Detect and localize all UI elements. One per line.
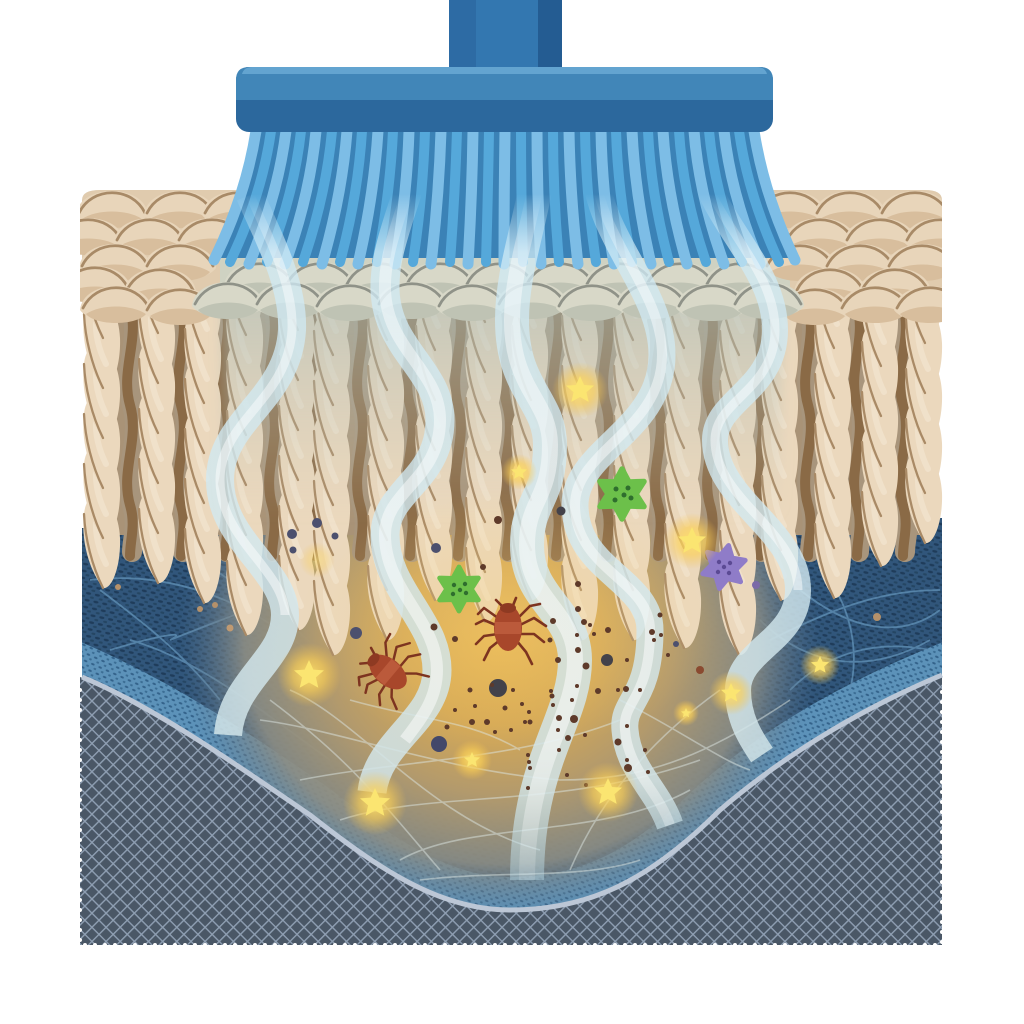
sparkle stars [277, 362, 840, 835]
warm glow over strand tips [300, 490, 720, 750]
dirt particles [115, 506, 881, 790]
pale divider line [82, 675, 942, 910]
microbe: green lower [440, 567, 478, 611]
damp tint on strands under the brush [222, 270, 782, 520]
golden glow behind debris [188, 535, 812, 908]
bug: mite on left [347, 626, 437, 717]
carpet backing layer [82, 518, 942, 908]
stream 2 [372, 190, 440, 792]
backing mesh [80, 675, 942, 945]
water streams [220, 165, 798, 880]
stream 4 [575, 170, 670, 825]
brush bristles [214, 131, 795, 264]
microbe: purple [700, 541, 748, 593]
brush handle [449, 0, 562, 68]
carpet pile: rear strands [88, 300, 933, 556]
bug: mite near centre [476, 598, 546, 664]
pale fibres in the glow [260, 690, 790, 880]
light blue band above the mesh [50, 665, 975, 910]
microbe: green upper [600, 469, 644, 519]
backing fibres [90, 570, 940, 700]
stream 5 [700, 165, 798, 755]
illustration: brush deep cleaning carpet [80, 0, 943, 945]
carpet top loops [52, 190, 976, 325]
brush head [236, 67, 773, 132]
carpet pile: twisted yarn strands [82, 296, 942, 656]
mesh frayed edge [80, 690, 942, 945]
stream 1 [220, 195, 292, 735]
microbes [440, 469, 748, 611]
stream 3 [512, 170, 575, 880]
